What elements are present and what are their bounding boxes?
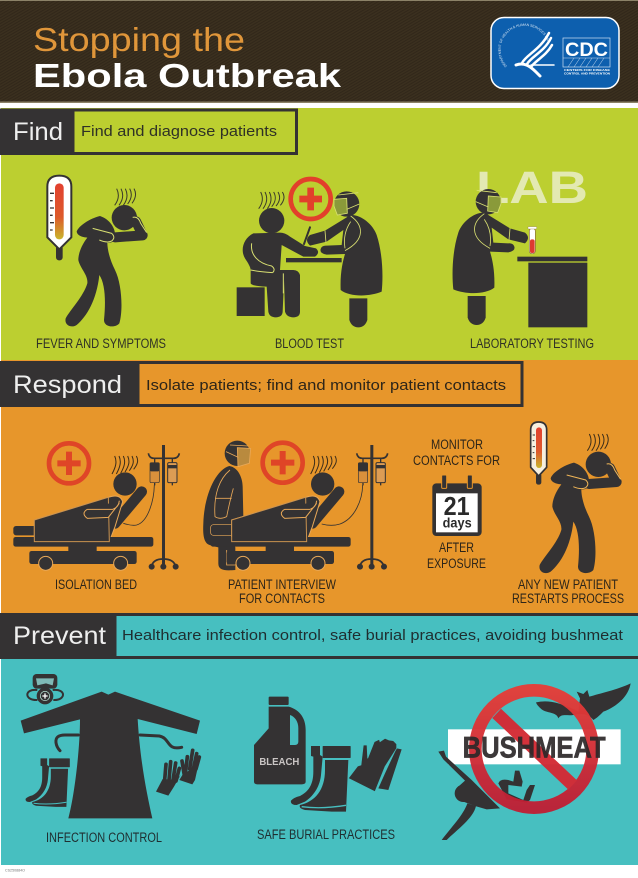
caption: patient interview for contacts: FOR CONTACTS <box>239 591 325 606</box>
icon: fever heat waves <box>115 189 136 205</box>
CDC and HHS logo: CENTERS FOR DISEASE <box>564 68 610 72</box>
heading: respond: Isolate patients; find and monitor patient contacts <box>146 378 506 394</box>
icon: IV stand <box>322 445 388 570</box>
label: bushmeat: BUSHMEAT <box>463 732 606 765</box>
icon: doctor in protective gear <box>307 191 382 327</box>
icon: thermometer <box>47 176 71 260</box>
icon: stool <box>237 287 265 316</box>
icon: bat <box>536 683 631 720</box>
icon: waves <box>259 192 284 209</box>
document code: CS250884O <box>5 868 25 872</box>
panel: find <box>0 108 638 360</box>
icon: technician <box>453 189 528 325</box>
icon: red cross <box>49 443 89 483</box>
CDC and HHS logo <box>490 16 620 90</box>
icon: 21 days calendar: 21 <box>444 491 470 521</box>
icon: falling person <box>438 751 535 840</box>
text: monitor contacts for: CONTACTS FOR <box>413 453 500 468</box>
caption: fever and symptoms: FEVER AND SYMPTOMS <box>36 336 166 351</box>
heading: find: Find and diagnose patients <box>81 124 277 140</box>
heading: prevent: Prevent <box>13 622 106 650</box>
icon: thermometer <box>531 422 547 485</box>
icon: IV stand <box>123 445 179 570</box>
icon: blood test scene <box>237 179 382 327</box>
bed with patient <box>211 456 351 570</box>
heading: prevent <box>0 613 638 659</box>
table <box>286 258 342 262</box>
caption: laboratory testing: LABORATORY TESTING <box>470 336 594 351</box>
caption: blood test: BLOOD TEST <box>275 336 344 351</box>
icon: gown with ties <box>21 692 200 818</box>
CDC and HHS logo: DEPARTMENT OF HEALTH & HUMAN SERVICES USA <box>498 24 549 68</box>
panel: prevent <box>0 613 638 865</box>
title <box>33 21 342 94</box>
CDC and HHS logo: CONTROL AND PREVENTION <box>564 72 610 76</box>
icon: bleach bottle: BLEACH <box>259 757 299 768</box>
fever person body <box>65 205 147 326</box>
icon: fever figure <box>47 176 147 326</box>
icon: red cross <box>291 179 331 219</box>
bed with patient <box>13 456 153 570</box>
heading: find <box>0 108 296 155</box>
pen <box>304 227 310 244</box>
icon: burial boots <box>291 746 351 812</box>
icon: patient interview scene <box>203 441 388 570</box>
heading: find: Find <box>13 118 63 146</box>
icon: test tube <box>528 227 537 254</box>
heading: respond: Respond <box>13 371 122 399</box>
panel: respond <box>0 360 638 613</box>
title: Stopping the <box>33 21 245 58</box>
text: monitor contacts for <box>413 437 500 468</box>
caption: isolation bed: ISOLATION BED <box>55 577 137 592</box>
icon: isolation bed scene <box>13 443 179 570</box>
title: Ebola Outbreak <box>33 57 342 94</box>
caption: any new patient restarts process <box>512 577 624 606</box>
label plate <box>448 729 621 764</box>
caption: patient interview for contacts <box>228 577 336 606</box>
icon: protective-suit interviewer <box>203 441 251 570</box>
caption: patient interview for contacts: PATIENT INTERVIEW <box>228 577 336 592</box>
header banner <box>0 0 638 103</box>
text: after exposure: AFTER <box>439 540 474 555</box>
icon: no symbol <box>475 690 593 808</box>
icon: infection control gown and mask <box>21 674 200 818</box>
icon: lab technician and desk <box>453 189 587 327</box>
icon: 21 days calendar <box>432 475 482 536</box>
icon: bleach bottle <box>254 697 306 784</box>
text: after exposure <box>427 540 486 571</box>
heading: respond <box>0 361 522 407</box>
icon: goggles and mask <box>27 674 63 704</box>
icon: 21 days calendar: days <box>443 514 472 530</box>
patient figure <box>243 208 318 317</box>
icon: small gloves <box>156 750 199 796</box>
icon: bushmeat prohibition <box>438 683 631 840</box>
icon: red cross <box>263 443 303 483</box>
icon: LAB wordmark: LAB <box>476 162 588 213</box>
caption: any new patient restarts process: ANY NEW PATIENT <box>518 577 618 592</box>
icon: small boots <box>26 758 70 807</box>
CDC and HHS logo: CDC <box>565 40 608 61</box>
caption: safe burial practices: SAFE BURIAL PRACTICES <box>257 827 395 842</box>
caption: infection control: INFECTION CONTROL <box>46 830 162 845</box>
icon: new patient figure <box>539 434 621 573</box>
text: monitor contacts for: MONITOR <box>431 437 483 452</box>
icon: lab desk <box>517 257 587 327</box>
icon: burial gloves <box>348 738 402 792</box>
text: after exposure: EXPOSURE <box>427 556 486 571</box>
heading: prevent: Healthcare infection control, safe burial practices, avoiding bushmeat <box>122 628 623 644</box>
